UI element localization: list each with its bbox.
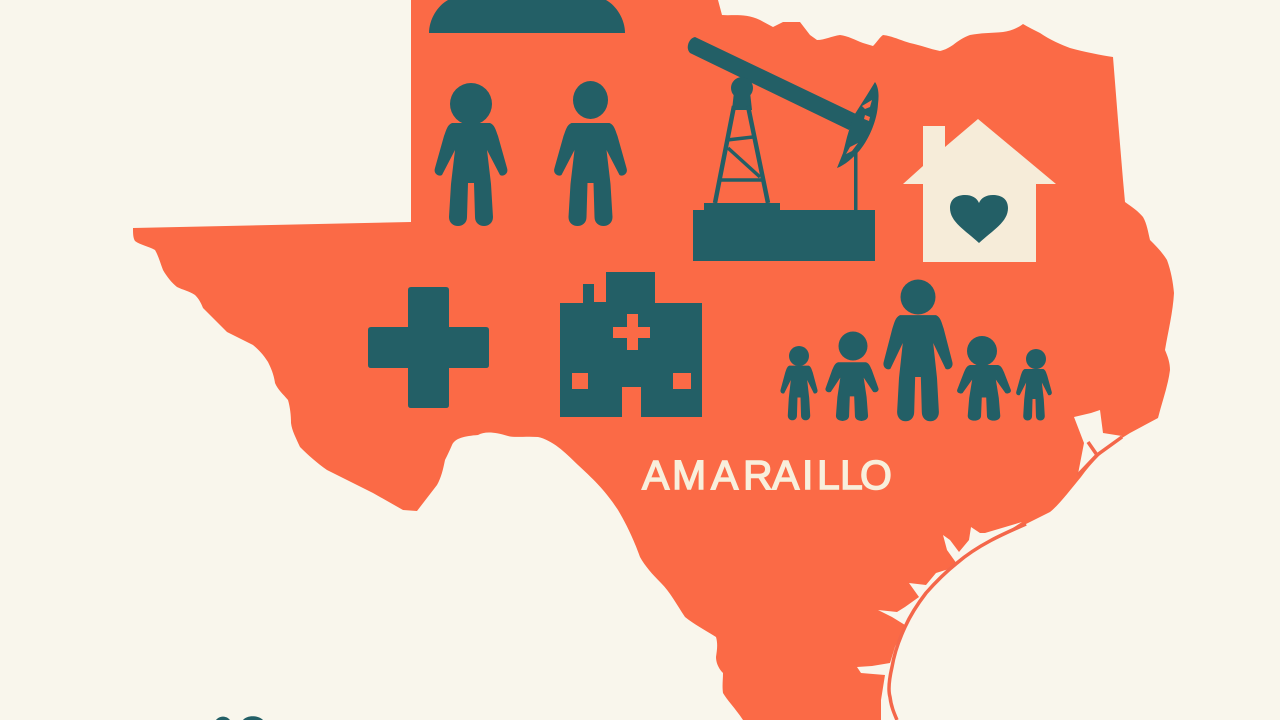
body xyxy=(554,123,627,226)
walking beam xyxy=(688,37,856,130)
icon: family of five xyxy=(780,280,1052,421)
hospital body xyxy=(560,272,702,417)
head xyxy=(450,83,492,125)
bay: Matagorda xyxy=(943,522,1022,564)
body xyxy=(435,123,507,226)
horse head xyxy=(837,82,879,168)
family member 4 xyxy=(957,336,1011,421)
derrick tower xyxy=(715,106,768,203)
family member 2 xyxy=(825,332,879,421)
coast spur xyxy=(1078,437,1122,475)
bay: Corpus Christi xyxy=(857,563,957,720)
pivot xyxy=(731,77,753,99)
derrick top xyxy=(732,92,752,110)
icon: person right xyxy=(554,81,627,226)
head xyxy=(573,81,608,119)
window right xyxy=(673,373,691,389)
icon: dome at top of panhandle xyxy=(429,0,625,33)
coast line xyxy=(889,524,1026,720)
icon: hospital building xyxy=(560,272,702,417)
heart xyxy=(950,195,1008,243)
icon: person left xyxy=(435,83,507,226)
derrick braces xyxy=(720,137,762,180)
hospital cross xyxy=(613,314,650,350)
family member 1 xyxy=(780,346,818,420)
family member 5 xyxy=(1016,349,1052,420)
pump rod xyxy=(854,150,858,210)
bay: Galveston xyxy=(1074,410,1122,474)
icon: medical cross xyxy=(368,287,489,408)
icon: house with heart xyxy=(903,119,1056,262)
coastline: bays and barrier islands xyxy=(857,410,1122,720)
city label: AMARAILLO xyxy=(642,452,892,498)
window left xyxy=(572,373,588,389)
icon: oil pump jack xyxy=(688,37,879,261)
house shape xyxy=(903,119,1056,262)
family member 3 xyxy=(883,280,953,421)
pump base xyxy=(693,203,875,261)
cropped title fragment at bottom edge xyxy=(216,716,263,720)
